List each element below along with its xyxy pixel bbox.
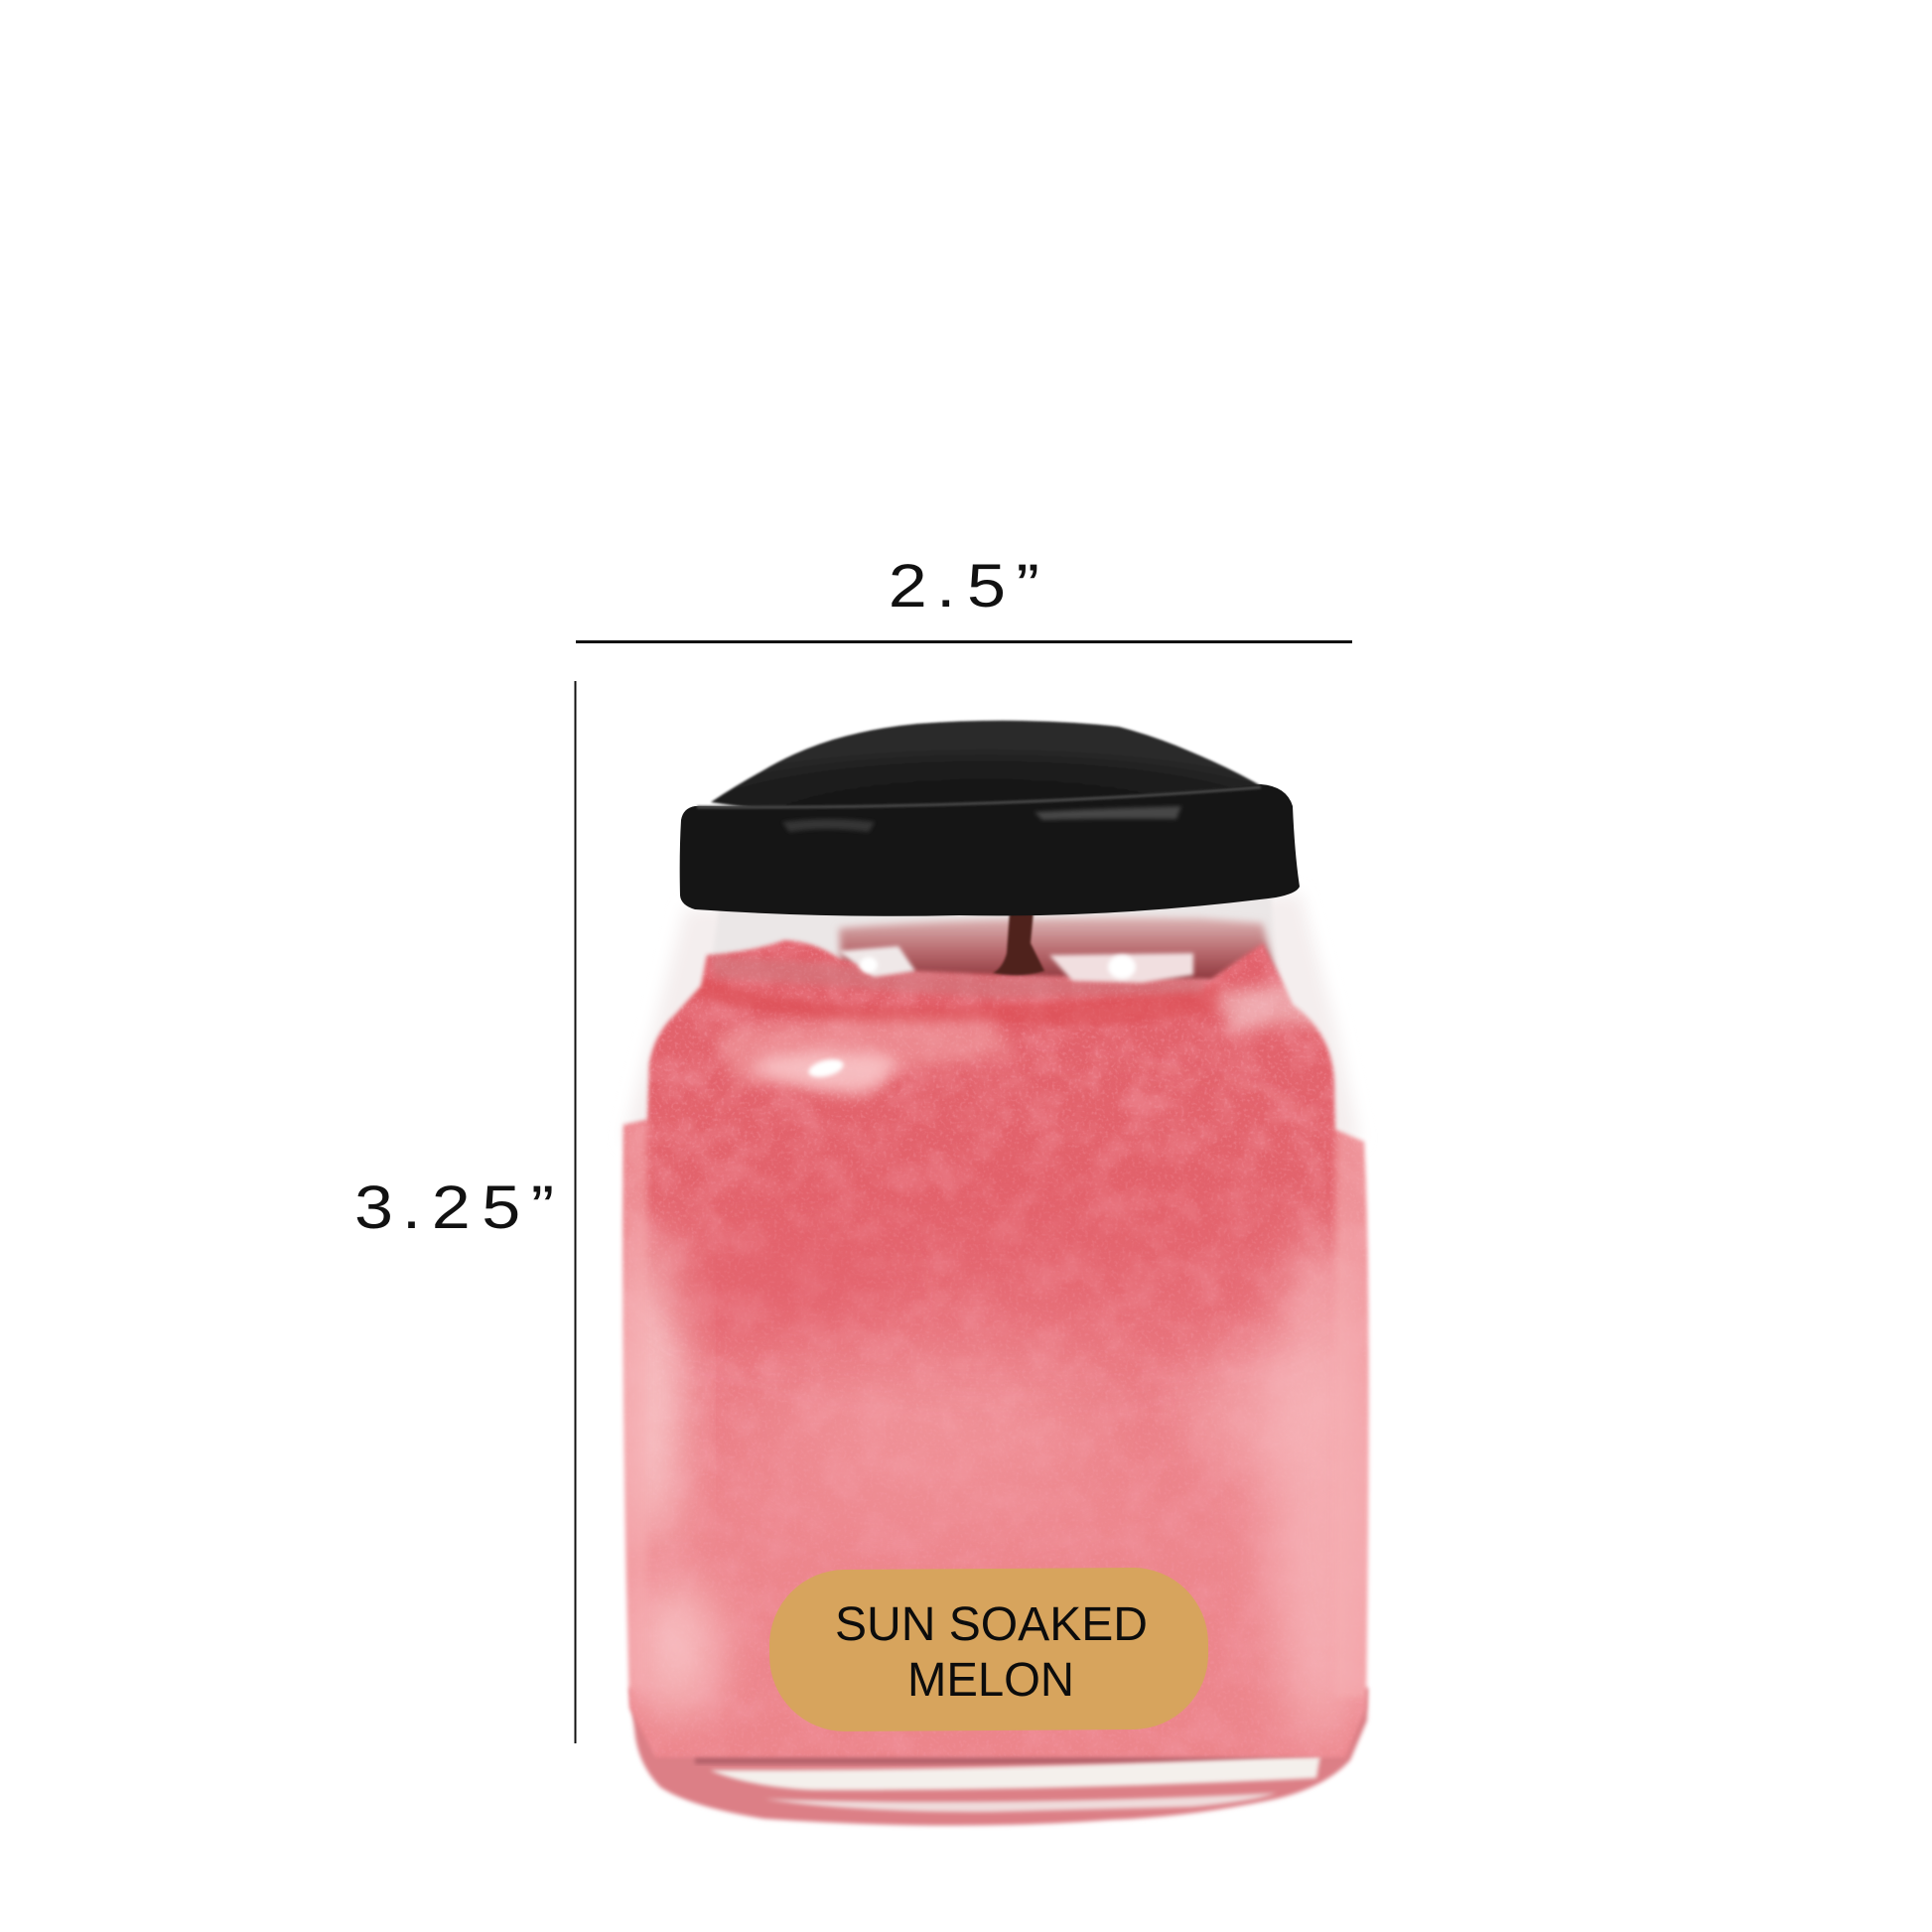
- wax surface highlights: [715, 1020, 1013, 1082]
- label text: SUN SOAKED: [835, 1598, 1148, 1651]
- lid dome: [711, 721, 1262, 844]
- bottom glass: [629, 1688, 1368, 1826]
- right halo on shoulder: [1216, 983, 1335, 1033]
- lid band: [680, 784, 1300, 916]
- lid reflections: [782, 819, 875, 832]
- wax top white patches: [838, 946, 1193, 983]
- shoulder highlight: [749, 1051, 895, 1095]
- wick: [993, 911, 1044, 975]
- candle jar: [596, 721, 1390, 1826]
- height line: [574, 681, 576, 1743]
- light blotches: [1266, 1231, 1375, 1747]
- infographic: candle jar with dimensions: [357, 564, 1372, 1829]
- scent label: MELON: [907, 1654, 1074, 1707]
- label shape: [768, 1567, 1209, 1732]
- glass neck: [710, 894, 1276, 973]
- wine shadow behind wick: [839, 917, 1276, 985]
- lid rim line: [697, 787, 1261, 807]
- dimension: width: [576, 551, 1352, 643]
- red lip band: [685, 978, 1221, 1026]
- wax body: [596, 923, 1390, 1767]
- lid: [680, 721, 1300, 916]
- height label: 3.25”: [354, 1173, 554, 1241]
- outer body fringe: [1335, 1132, 1371, 1698]
- width label: 2.5”: [889, 551, 1039, 620]
- glass halo: [623, 894, 1360, 1142]
- width line: [576, 640, 1352, 643]
- darker band: [716, 1154, 1252, 1322]
- scent label: [768, 1567, 1209, 1732]
